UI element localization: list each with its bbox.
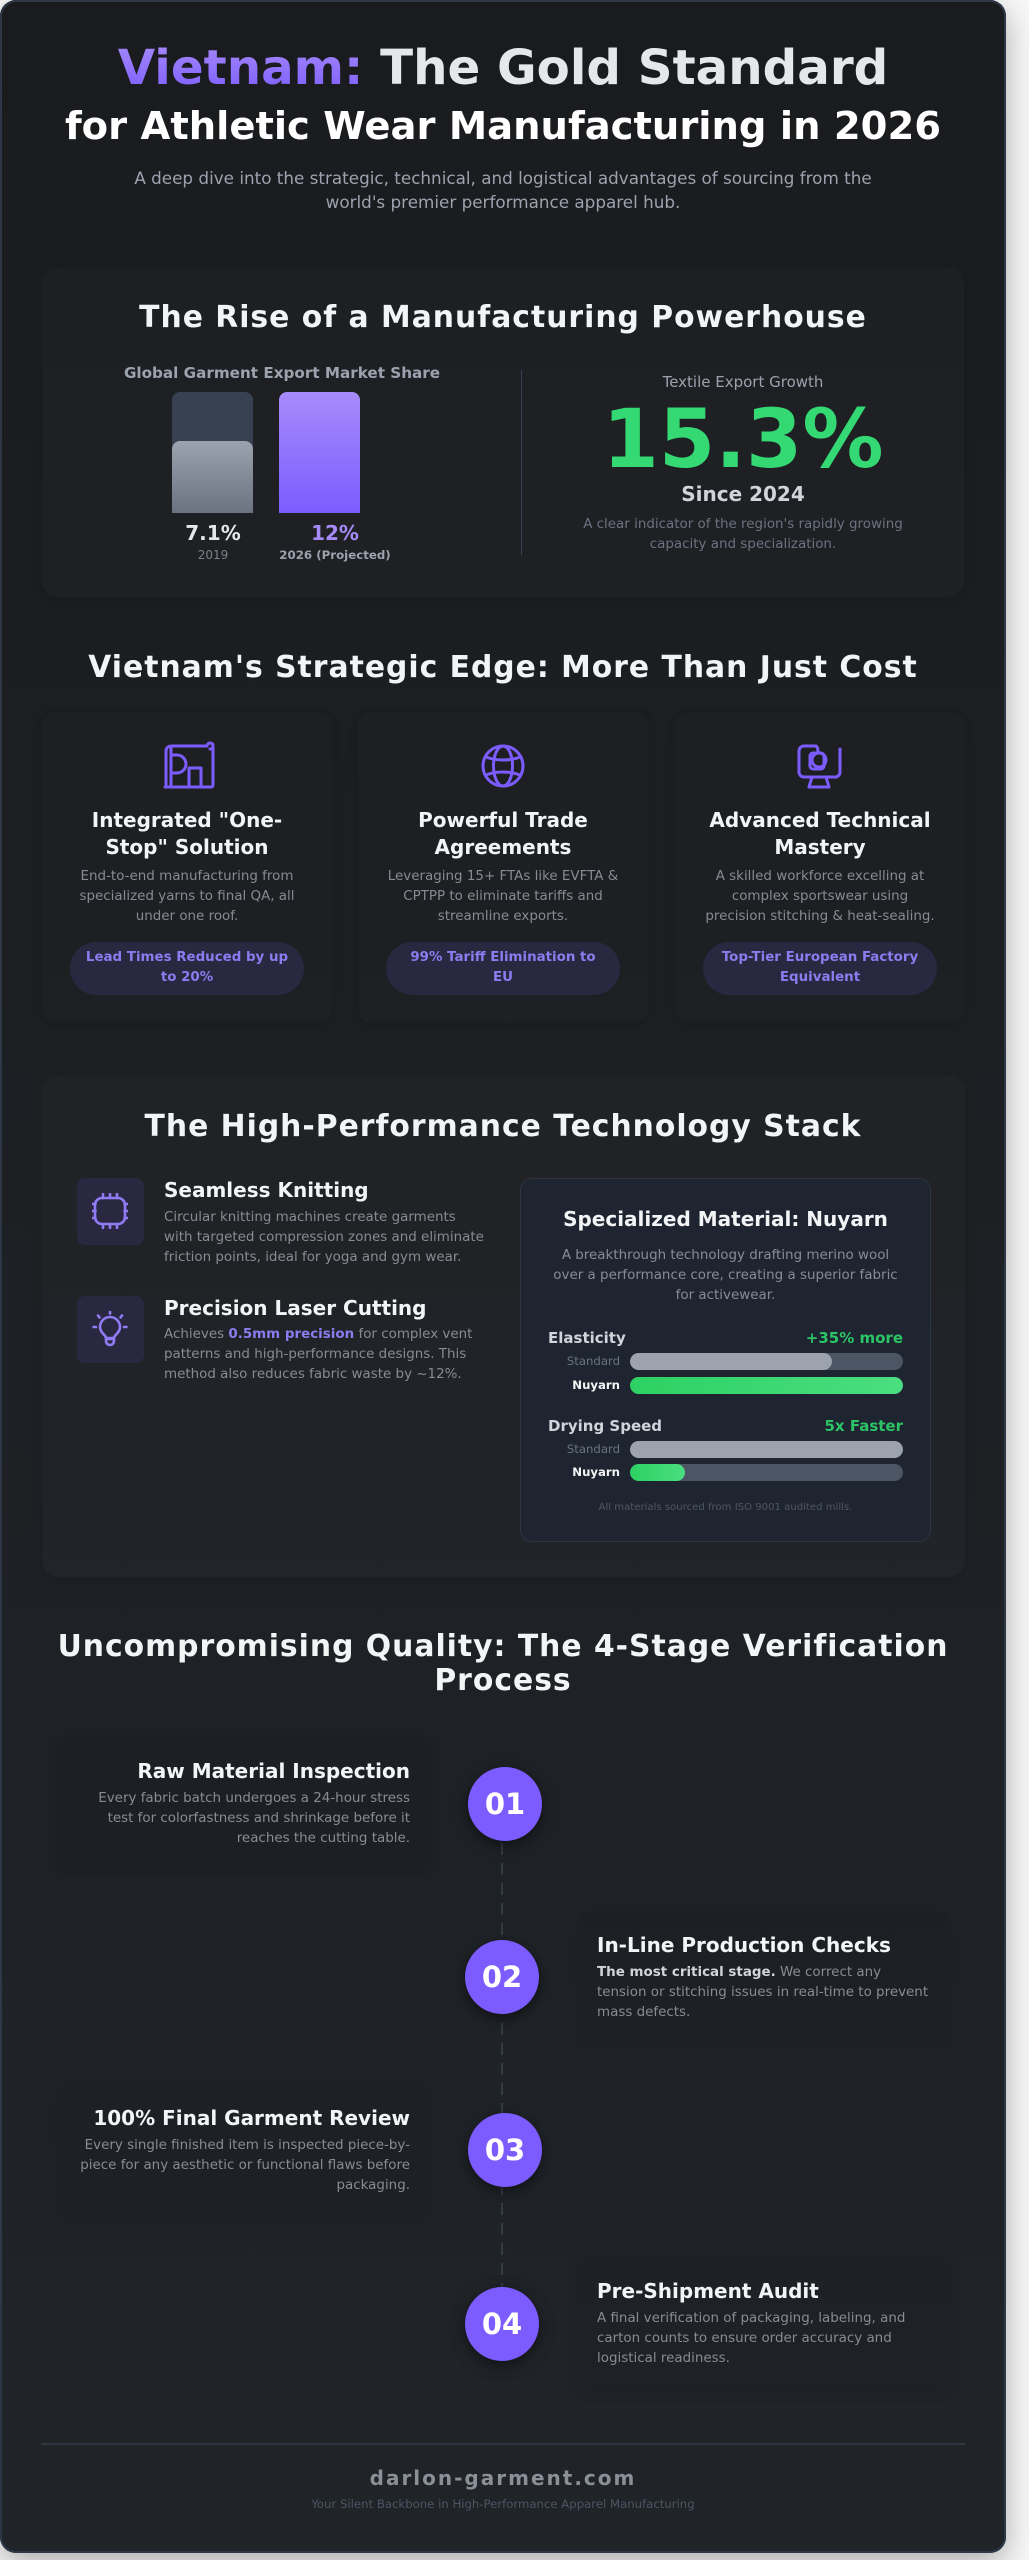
feature description: Achieves 0.5mm precision for complex vent — [164, 1327, 472, 1342]
card description — [388, 869, 618, 924]
heading: verification process — [58, 1629, 948, 1698]
feature description: Circular knitting machines create garments — [164, 1210, 456, 1225]
stat value: 15.3% — [602, 393, 884, 487]
heading: verification process: Uncompromising Quality: The 4-Stage Verification — [58, 1629, 948, 1664]
footnote: All materials sourced from ISO 9001 audited mills. — [599, 1502, 852, 1513]
step 4 number — [465, 2287, 539, 2361]
step description: test for colorfastness and shrinkage before it — [108, 1811, 410, 1826]
feature title: Seamless Knitting — [164, 1178, 369, 1202]
stat description: A clear indicator of the region's rapidly growing — [583, 517, 903, 532]
material description: over a performance core, creating a superior fabric — [553, 1268, 898, 1283]
metric pill: to 20% — [161, 970, 213, 985]
header — [65, 40, 941, 212]
step description: packaging. — [336, 2178, 410, 2193]
card description — [80, 869, 294, 924]
bar chart: global garment export market share — [124, 364, 440, 562]
feature: seamless knitting — [164, 1178, 484, 1265]
metric pill: Equivalent — [780, 970, 860, 985]
card title: Mastery — [774, 835, 866, 859]
metric label: Drying Speed — [548, 1417, 662, 1435]
standard label: Standard — [567, 1442, 620, 1456]
metric pill — [386, 942, 620, 995]
subtitle: world's premier performance apparel hub. — [326, 192, 680, 212]
standard label: Standard — [567, 1354, 620, 1368]
metric value: +35% more — [806, 1329, 903, 1347]
metric pill: Lead Times Reduced by up — [86, 950, 288, 965]
panel: manufacturing powerhouse — [42, 267, 964, 597]
metric pill: EU — [493, 970, 513, 985]
stat description — [583, 517, 903, 552]
label 2026: 2026 (Projected) — [279, 548, 391, 562]
step description: A final verification of packaging, labeling, and — [597, 2311, 905, 2326]
card title — [92, 808, 282, 859]
card title: Integrated "One- — [92, 808, 282, 832]
card: technical mastery — [675, 712, 965, 1023]
card title: Advanced Technical — [709, 808, 931, 832]
tagline: Your Silent Backbone in High-Performance Apparel Manufacturing — [311, 2497, 695, 2511]
step description: tension or stitching issues in real-time to prevent — [597, 1985, 928, 2000]
card title — [418, 808, 588, 859]
step description — [597, 2311, 905, 2366]
step 2 number — [465, 1940, 539, 2014]
standard bar — [630, 1441, 903, 1458]
stat description: capacity and specialization. — [650, 537, 836, 552]
card description: streamline exports. — [438, 909, 568, 924]
bar 2019 — [172, 392, 253, 513]
metric pill: Top-Tier European Factory — [722, 950, 918, 965]
metric pill: 99% Tariff Elimination to — [410, 950, 596, 965]
icon: globe — [482, 744, 524, 788]
metric label: Elasticity — [548, 1329, 626, 1347]
step description: carton counts to ensure order accuracy and — [597, 2331, 892, 2346]
card description: under one roof. — [136, 909, 238, 924]
step 3 number: 03 — [485, 2133, 525, 2167]
step description: piece for any aesthetic or functional flaws before — [80, 2158, 410, 2173]
website: darlon-garment.com — [370, 2466, 636, 2490]
card description: A skilled workforce excelling at — [716, 869, 924, 884]
material description — [553, 1248, 898, 1303]
nuyarn bar — [630, 1377, 903, 1394]
step description: mass defects. — [597, 2005, 690, 2020]
icon: factory — [164, 742, 214, 788]
card title — [709, 808, 931, 859]
card description: Leveraging 15+ FTAs like EVFTA & — [388, 869, 618, 884]
card description: End-to-end manufacturing from — [81, 869, 293, 884]
subtitle — [134, 168, 872, 212]
card: one-stop solution — [42, 712, 332, 1023]
step description: The most critical stage. We correct any — [597, 1965, 881, 1980]
stat: textile export growth — [583, 373, 903, 552]
icon: light bulb — [77, 1296, 144, 1363]
feature: precision laser cutting — [164, 1296, 472, 1382]
heading: The High-Performance Technology Stack — [145, 1109, 861, 1144]
heading: The Rise of a Manufacturing Powerhouse — [139, 300, 867, 335]
panel: technology stack — [42, 1075, 965, 1577]
step 4 card — [577, 2257, 951, 2389]
panel: specialized material nuyarn — [520, 1178, 931, 1542]
card title: Stop" Solution — [105, 835, 269, 859]
metric value: 5x Faster — [824, 1417, 903, 1435]
icon: chip — [77, 1178, 144, 1245]
step title: 100% Final Garment Review — [93, 2106, 410, 2130]
chart title: Global Garment Export Market Share — [124, 364, 440, 382]
stat since: Since 2024 — [681, 482, 805, 506]
step description: reaches the cutting table. — [237, 1831, 410, 1846]
metric pill — [70, 942, 304, 995]
comparison: elasticity — [548, 1329, 903, 1394]
step description: logistical readiness. — [597, 2351, 730, 2366]
step 1 number — [468, 1767, 542, 1841]
heading: verification process: Process — [434, 1663, 572, 1698]
card description: precision stitching & heat-sealing. — [705, 909, 935, 924]
step title: In-Line Production Checks — [597, 1933, 891, 1957]
step 2 card — [577, 1911, 951, 2043]
feature description — [164, 1327, 472, 1382]
standard bar — [630, 1353, 903, 1370]
icon: monitor — [798, 744, 842, 788]
nuyarn label: Nuyarn — [572, 1378, 620, 1392]
material description: for activewear. — [676, 1288, 775, 1303]
feature description: friction points, ideal for yoga and gym wear. — [164, 1250, 461, 1265]
nuyarn bar — [630, 1464, 903, 1481]
title line 1: Vietnam: The Gold Standard — [118, 40, 888, 96]
stat label: Textile Export Growth — [663, 373, 823, 391]
metric pill — [703, 942, 937, 995]
bar 2026 — [279, 392, 360, 513]
footer — [41, 2443, 965, 2523]
step description: Every fabric batch undergoes a 24-hour stress — [98, 1791, 410, 1806]
value 2026: 12% — [311, 521, 359, 545]
step description — [597, 1965, 928, 2020]
step 3 number — [468, 2113, 542, 2187]
card description: specialized yarns to final QA, all — [80, 889, 294, 904]
heading: strategic edge: Vietnam's Strategic Edge: More Than Just Cost — [88, 650, 918, 685]
label 2019: 2019 — [198, 548, 228, 562]
step 3 card — [56, 2083, 431, 2217]
feature description: with targeted compression zones and eliminate — [164, 1230, 484, 1245]
feature description: method also reduces fabric waste by ~12%. — [164, 1367, 462, 1382]
subtitle: A deep dive into the strategic, technical, and logistical advantages of sourcing from the — [134, 168, 872, 188]
step 2 number: 02 — [482, 1960, 522, 1994]
feature description — [164, 1210, 484, 1265]
step description: Every single finished item is inspected piece-by- — [85, 2138, 410, 2153]
step 1 card — [56, 1737, 431, 1871]
step 4 number: 04 — [482, 2307, 522, 2341]
material title: Specialized Material: Nuyarn — [563, 1207, 888, 1231]
step title: Raw Material Inspection — [137, 1759, 410, 1783]
card description: complex sportswear using — [732, 889, 908, 904]
card description — [705, 869, 935, 924]
card description: CPTPP to eliminate tariffs and — [403, 889, 603, 904]
step title: Pre-Shipment Audit — [597, 2279, 819, 2303]
timeline connector — [502, 1843, 503, 2287]
step description — [98, 1791, 410, 1846]
card title: Agreements — [435, 835, 571, 859]
feature description: patterns and high-performance designs. This — [164, 1347, 466, 1362]
material description: A breakthrough technology drafting merino wool — [562, 1248, 889, 1263]
card title: Powerful Trade — [418, 808, 588, 832]
feature title: Precision Laser Cutting — [164, 1296, 426, 1320]
comparison: drying speed — [548, 1417, 903, 1481]
step 1 number: 01 — [485, 1787, 525, 1821]
card: trade agreements — [358, 712, 648, 1023]
title line 2: for Athletic Wear Manufacturing in 2026 — [65, 104, 941, 149]
value 2019: 7.1% — [185, 521, 241, 545]
step description — [80, 2138, 410, 2193]
nuyarn label: Nuyarn — [572, 1465, 620, 1479]
